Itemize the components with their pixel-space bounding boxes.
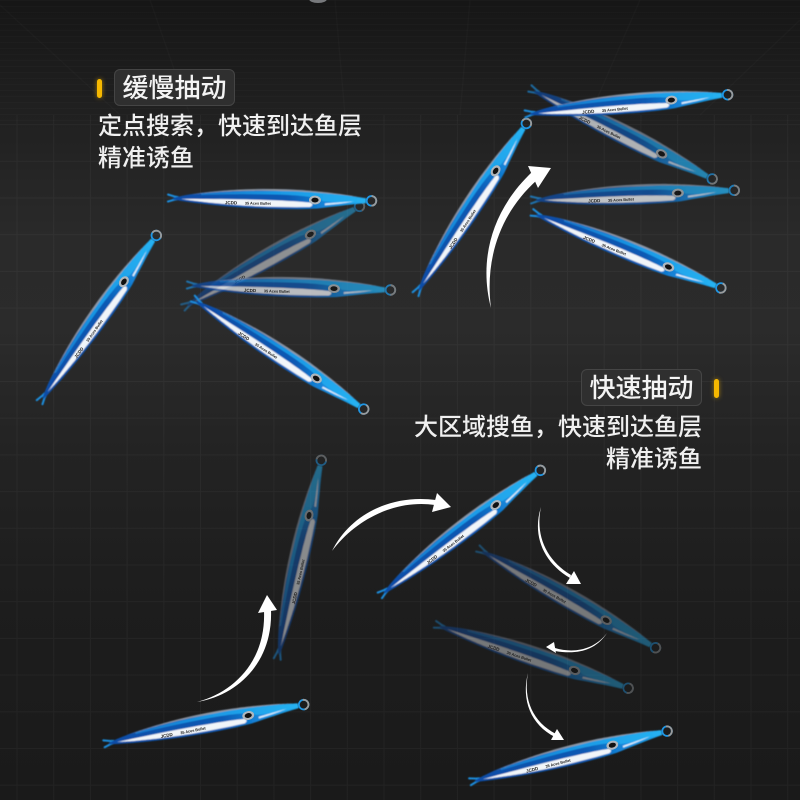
lure: bottom right: 35 Aces Bullet xyxy=(545,758,572,769)
lure: lower xyxy=(528,203,729,298)
lure: ghost vertical xyxy=(267,453,332,661)
background grid xyxy=(0,0,796,120)
lure: rising left: JCDD xyxy=(448,236,459,250)
lure: ghost swing: JCDD xyxy=(233,274,247,285)
text: fast jig description: 精准诱鱼 xyxy=(606,446,702,473)
lure: lower diagonal: JCDD xyxy=(237,331,251,342)
heading: slow jig: 缓慢抽动 xyxy=(122,73,226,103)
lure: ghost right lower: 35 Aces Bullet xyxy=(506,651,533,663)
lure: middle horizontal dimmed: 35 Aces Bullet xyxy=(264,289,290,294)
text: slow jig description: 精准诱鱼 xyxy=(98,145,194,172)
lure: top horizontal: 35 Aces Bullet xyxy=(245,201,272,206)
lure: left upward: JCDD xyxy=(73,346,85,359)
lure: ghost vertical: 35 Aces Bullet xyxy=(296,558,306,585)
arrow: return left xyxy=(546,633,607,653)
lure: top: JCDD xyxy=(582,109,595,115)
lure: ghost right upper: 35 Aces Bullet xyxy=(542,588,567,605)
lure: bottom right xyxy=(467,720,674,791)
lure: bottom left: 35 Aces Bullet xyxy=(180,726,207,735)
lure: ghost right upper: JCDD xyxy=(525,578,538,588)
heading: fast jig: 快速抽动 xyxy=(589,373,694,403)
lure: ghost vertical: JCDD xyxy=(291,591,299,605)
lure: middle dimmed: 35 Aces Bullet xyxy=(608,197,635,203)
lure: ghost right lower xyxy=(432,614,636,699)
marker: fast jig xyxy=(714,379,719,398)
arrow: over the top xyxy=(332,493,451,551)
lure: middle dimmed xyxy=(531,180,740,209)
lure: lower diagonal xyxy=(188,290,373,420)
lure: lower: JCDD xyxy=(582,235,596,244)
lure: top xyxy=(524,84,733,123)
lure: ghost right upper xyxy=(473,539,665,658)
slow jig group: lures xyxy=(31,188,395,420)
top edge ring fragment xyxy=(309,0,327,3)
lure: rising left: 35 Aces Bullet xyxy=(459,209,477,233)
lure: ghost right lower: JCDD xyxy=(487,644,501,652)
lure: lower: 35 Aces Bullet xyxy=(601,243,627,257)
arrow: drop bottom xyxy=(526,673,564,740)
text: fast jig description: 大区域搜鱼，快速到达鱼层 xyxy=(414,414,702,441)
lure: ghost upper diagonal: 35 Aces Bullet xyxy=(596,125,622,140)
lure: ghost upper diagonal: JCDD xyxy=(578,115,592,125)
arrow: drop right xyxy=(538,507,581,584)
lure: middle dimmed: JCDD xyxy=(588,198,601,204)
lure: ghost upper diagonal xyxy=(526,79,721,190)
marker: slow jig xyxy=(97,79,102,98)
arrow: bottom left rise xyxy=(197,595,277,702)
lure: rising left xyxy=(407,114,537,299)
lure: left upward xyxy=(31,226,167,408)
text: slow jig description xyxy=(98,113,362,172)
lure: centre rising: 35 Aces Bullet xyxy=(442,534,465,553)
lure: ghost swing xyxy=(178,195,368,316)
lure: left upward: 35 Aces Bullet xyxy=(86,319,104,343)
text: slow jig description: 定点搜索，快速到达鱼层 xyxy=(98,113,362,140)
lure: bottom left xyxy=(102,693,310,753)
lure: top horizontal: JCDD xyxy=(225,200,238,205)
lure: top: 35 Aces Bullet xyxy=(602,107,629,113)
lure: centre rising: JCDD xyxy=(426,553,439,565)
lure: bottom left: JCDD xyxy=(160,732,174,739)
heading: slow jig xyxy=(114,69,235,106)
lure: lower diagonal: 35 Aces Bullet xyxy=(254,342,278,360)
text: fast jig description xyxy=(414,414,702,473)
lure: top horizontal xyxy=(168,188,376,210)
lure: middle horizontal dimmed: JCDD xyxy=(244,288,257,293)
lure: bottom right: JCDD xyxy=(526,766,539,774)
heading: fast jig xyxy=(581,369,702,406)
slow jig group: right lures xyxy=(407,79,740,299)
fast jig group: lures xyxy=(102,453,674,791)
lure: middle horizontal dimmed xyxy=(187,275,395,300)
arrow: slow jig rise xyxy=(486,166,551,308)
lure: centre rising xyxy=(373,459,550,603)
